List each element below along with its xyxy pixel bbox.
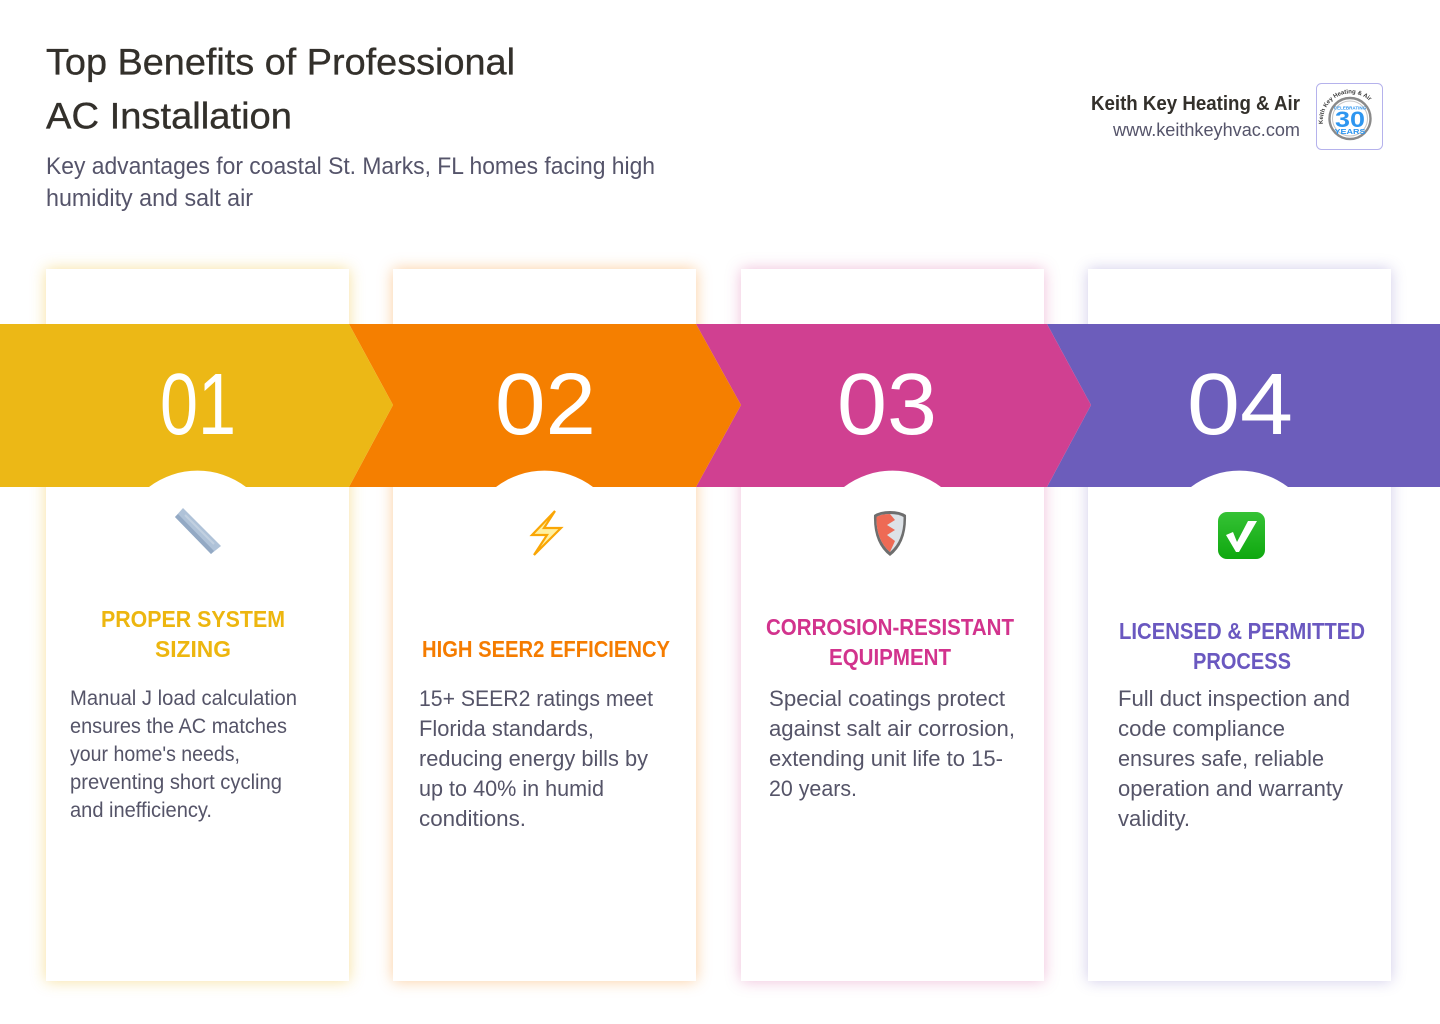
body text: operation and warranty (1118, 776, 1343, 801)
panel: step 2 high SEER2 efficiency (393, 269, 696, 981)
body text: 20 years. (769, 776, 857, 801)
company branding (1091, 83, 1383, 150)
header (46, 42, 655, 212)
icon: shield (874, 511, 906, 556)
heading: CORROSION-RESISTANT (766, 614, 1014, 640)
panel: step 1 proper system sizing (46, 269, 349, 981)
logo: 30 years badge: 30 (1335, 107, 1365, 132)
white notch circle (1191, 471, 1288, 487)
logo: 30 years badge: YEARS (1334, 127, 1366, 136)
body text (769, 686, 1015, 801)
body text: preventing short cycling (70, 771, 282, 794)
number 02: 02 (495, 356, 596, 453)
icon: ruler (175, 508, 221, 554)
heading: PROPER SYSTEM (101, 606, 285, 632)
heading: SIZING (155, 636, 231, 662)
logo: 30 years badge: CELEBRATING (1334, 106, 1367, 110)
subtitle: Key advantages for coastal St. Marks, FL homes facing high (46, 153, 655, 180)
arrow: orange segment 02 (349, 324, 741, 487)
panel: step 3 corrosion-resistant equipment (741, 269, 1044, 981)
arrow: magenta segment 03 (696, 324, 1091, 487)
body text (419, 686, 653, 831)
body text: extending unit life to 15- (769, 746, 1003, 771)
title (46, 42, 515, 136)
body text: Full duct inspection and (1118, 686, 1350, 711)
heading: HIGH SEER2 EFFICIENCY (422, 636, 670, 662)
body text: Florida standards, (419, 716, 594, 741)
heading (1119, 618, 1365, 674)
body text: reducing energy bills by (419, 746, 648, 771)
body text: and inefficiency. (70, 799, 212, 822)
subtitle: humidity and salt air (46, 185, 253, 212)
heading: PROCESS (1193, 648, 1291, 674)
company website: www.keithkeyhvac.com (1112, 119, 1300, 140)
logo: 30 years badge: Keith Key Heating & Air (1318, 89, 1372, 124)
body text: 15+ SEER2 ratings meet (419, 686, 653, 711)
body text: up to 40% in humid (419, 776, 604, 801)
white notch circle (149, 471, 246, 487)
body text: Special coatings protect (769, 686, 1005, 711)
white notch circle (496, 471, 593, 487)
subtitle (46, 153, 655, 212)
icon: lightning bolt (532, 511, 561, 555)
heading (766, 614, 1014, 670)
heading (101, 606, 285, 662)
icon: check mark (1218, 512, 1265, 559)
body text: code compliance (1118, 716, 1285, 741)
body text: Manual J load calculation (70, 687, 297, 710)
body text (1118, 686, 1350, 831)
company name: Keith Key Heating & Air (1091, 93, 1300, 115)
arrow: yellow segment 01 (0, 324, 393, 487)
number 04: 04 (1187, 356, 1293, 453)
body text: your home's needs, (70, 743, 240, 766)
heading: LICENSED & PERMITTED (1119, 618, 1365, 644)
panel: step 4 licensed and permitted process (1088, 269, 1391, 981)
body text (70, 687, 297, 822)
body text: against salt air corrosion, (769, 716, 1015, 741)
number 01: 01 (160, 356, 236, 453)
logo: 30 years badge (1316, 83, 1383, 150)
body text: validity. (1118, 806, 1190, 831)
heading: EQUIPMENT (829, 644, 951, 670)
title: Top Benefits of Professional (46, 42, 515, 82)
body text: ensures the AC matches (70, 715, 287, 738)
body text: ensures safe, reliable (1118, 746, 1324, 771)
arrow band (0, 324, 1440, 487)
body text: conditions. (419, 806, 526, 831)
white notch circle (844, 471, 941, 487)
arrow: purple segment 04 (1047, 324, 1440, 487)
title: AC Installation (46, 96, 292, 136)
number 03: 03 (837, 356, 937, 453)
